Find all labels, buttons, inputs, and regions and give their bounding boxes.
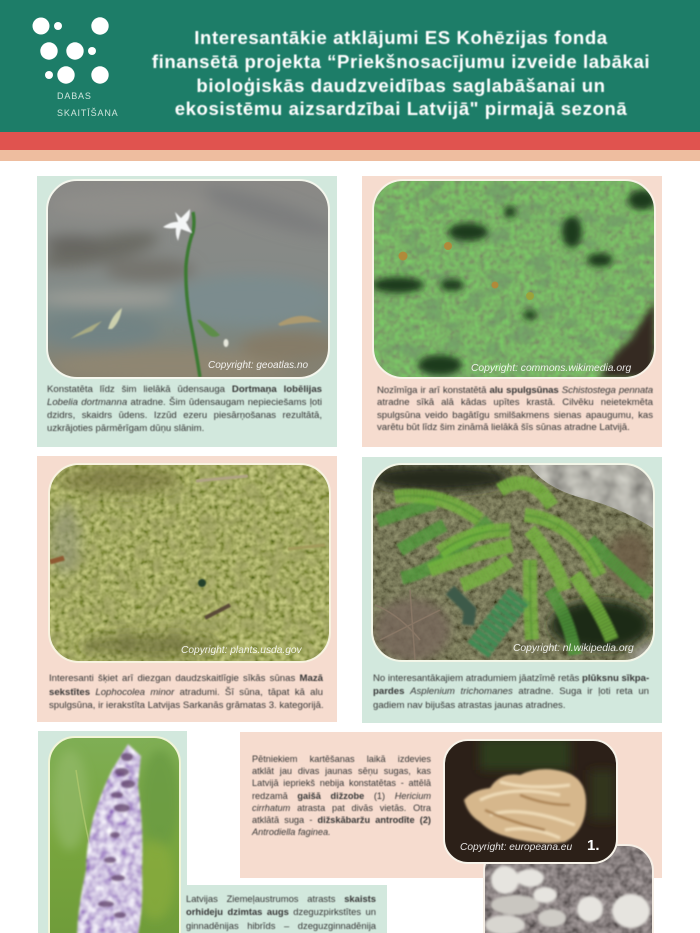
title: ekosistēmu aizsardzībai Latvijā" pirmajā sezonā — [175, 98, 627, 119]
caption text: atklāt jau divas jaunas sēņu sugas, kas — [252, 766, 431, 776]
copyright caption: Copyright: europeana.eu — [460, 842, 572, 853]
photo: maidenhair spleenwort — [371, 463, 655, 662]
title — [151, 27, 650, 120]
caption text: Konstatēta līdz šim lielākā ūdensauga Dortmaņa lobēlijas — [47, 384, 322, 395]
caption text: cirrhatum atrasta pat divās vietās. Otra — [252, 803, 431, 813]
caption text: spulgsūna, ir ierakstīta Latvijas Sarkanās grāmatas 3. kategorijā. — [49, 700, 324, 711]
caption text — [251, 754, 432, 838]
photo 2: white fungus — [483, 844, 654, 933]
title: bioloģiskās daudzveidības saglabāšanai un — [196, 75, 606, 96]
caption text: atklātā suga - dižskābaržu antrodīte (2) — [252, 815, 431, 825]
photo: orchid — [48, 736, 181, 933]
title: finansētā projekta “Priekšnosacījumu izveide labākai — [152, 51, 650, 72]
caption text — [46, 384, 322, 434]
caption text: orhideju dzimtas augs dzeguzpirkstītes un — [186, 906, 376, 917]
copyright caption: Copyright: nl.wikipedia.org — [513, 643, 634, 654]
caption text: Pētniekiem kartēšanas laikā izdevies — [252, 754, 431, 764]
caption text — [376, 384, 654, 433]
number label 1: 1. — [587, 837, 600, 854]
panel: orchid photo — [38, 731, 187, 933]
panel: orchid text — [187, 885, 387, 933]
photo: goblin moss — [372, 179, 656, 379]
panel: plūksnu sīkpaparde — [362, 457, 662, 723]
copyright caption: Copyright: geoatlas.no — [208, 360, 308, 371]
caption text: ginnadēnijas hibrīds – dzeguzginnadēnija — [186, 920, 376, 931]
logo: Dabas skaitīšana: DABAS — [57, 91, 92, 101]
logo: Dabas skaitīšana: SKAITĪŠANA — [57, 108, 119, 118]
panel: fungi — [240, 732, 662, 878]
caption text: pardes Asplenium trichomanes atradne. Suga ir ļoti reta un — [373, 686, 649, 697]
caption text: atradne sīkā alā kādas upītes krastā. Cilvēku neietekmēta — [377, 397, 653, 408]
photo 1: tan fungus — [443, 739, 618, 864]
caption text: Lobelia dortmanna atradne. Šim ūdensaugam nepieciešams ļoti — [47, 397, 322, 408]
caption text — [372, 673, 650, 711]
header band — [0, 0, 700, 161]
caption text: redzamā gaišā dižzobe (1) Hericium — [252, 791, 431, 801]
panel: Dortmaņa lobēlija — [37, 176, 337, 447]
caption text: No interesantākajiem atradumiem jāatzīmē retās plūksnu sīkpa- — [373, 673, 649, 684]
caption text: Antrodiella faginea. — [252, 827, 331, 837]
caption text: Latvijas Ziemeļaustrumos atrasts skaists — [186, 893, 376, 904]
photo: liverwort moss — [48, 463, 331, 663]
panel: alu spulgsūna — [362, 176, 662, 447]
title: Interesantākie atklājumi ES Kohēzijas fonda — [194, 27, 608, 48]
caption text: varētu būt līdz šim zināmā lielākā šīs sūnas atradne Latvijā. — [377, 422, 630, 433]
caption text: sekstītes Lophocolea minor atradumi. Šī sūna, tāpat kā alu — [49, 686, 323, 698]
logo: Dabas skaitīšana — [32, 17, 119, 118]
caption text: Interesanti šķiet arī diezgan daudzskaitlīgie sīkās sūnas Mazā — [49, 673, 323, 684]
caption text — [48, 673, 324, 711]
copyright caption: Copyright: commons.wikimedia.org — [471, 363, 631, 374]
caption text: Latvijā iepriekš nebija konstatētas - attēlā — [252, 778, 431, 788]
caption text: gadiem nav bijušas atrastas jaunas atradnes. — [373, 700, 566, 710]
copyright caption: Copyright: plants.usda.gov — [181, 645, 302, 656]
panel: mazā sekstīte — [37, 456, 337, 722]
caption text: spulgsūna veido bagātīgu smilšakmens sienas apaugumu, kas — [377, 410, 653, 420]
caption text — [186, 893, 376, 932]
photo: water lobelia — [46, 179, 330, 379]
caption text: uzkrājoties pārmērīgam dūņu slānim. — [47, 423, 204, 434]
caption text: dzidrs, skaidrs ūdens. Izzūd ezeru piesārņošanas rezultātā, — [47, 410, 322, 421]
caption text: Nozīmīga ir arī konstatētā alu spulgsūnas Schistostega pennata — [377, 384, 653, 396]
